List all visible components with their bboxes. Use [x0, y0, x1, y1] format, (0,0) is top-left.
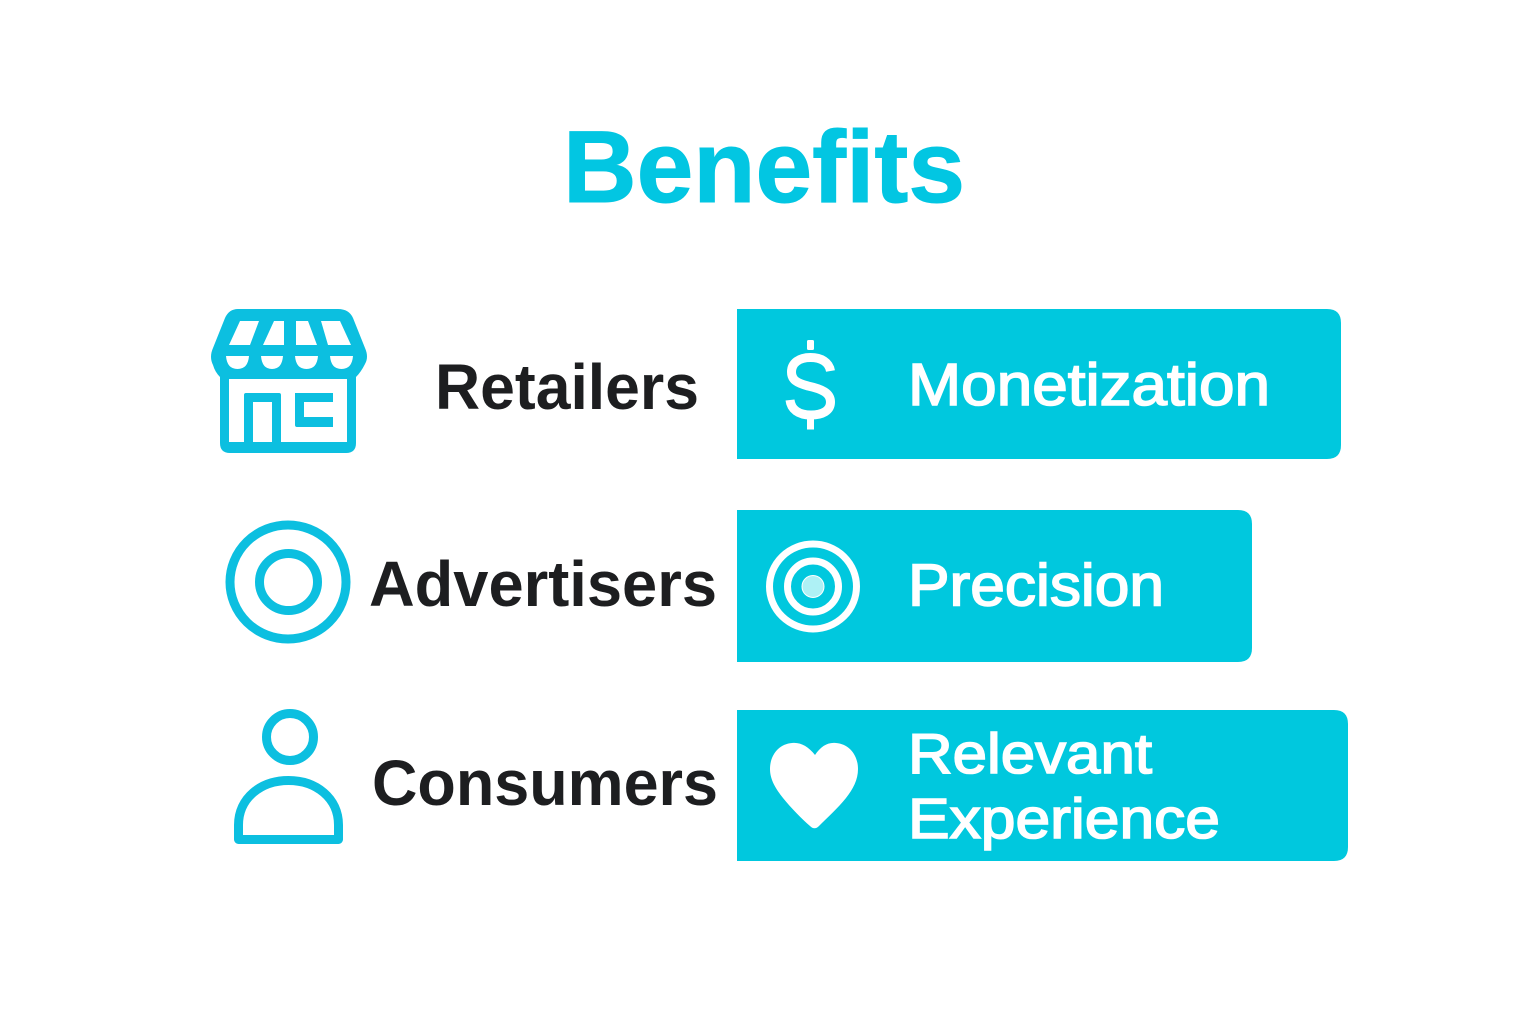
panel: relevant experience: [737, 710, 1348, 861]
panel: precision: [737, 510, 1252, 662]
icon: person: [238, 714, 338, 840]
title: Benefits: [563, 110, 965, 224]
text: precision: Precision: [908, 552, 1164, 618]
text: relevant experience: Relevant: [908, 722, 1152, 786]
label: consumers: Consumers: [372, 747, 718, 819]
label: advertisers: Advertisers: [369, 548, 717, 620]
text: relevant experience: [908, 722, 1220, 851]
panel: monetization: [737, 309, 1341, 459]
icon: dollar sign: [790, 340, 830, 430]
icon: target outline: [230, 525, 346, 639]
row: advertisers: [230, 510, 1252, 662]
icon: bullseye: [770, 544, 856, 629]
row: retailers: [211, 309, 1341, 459]
text: monetization: Monetization: [908, 352, 1270, 418]
text: relevant experience: Experience: [908, 787, 1220, 851]
row: consumers: [238, 710, 1348, 861]
label: retailers: Retailers: [435, 351, 699, 423]
icon: heart: [770, 743, 858, 828]
icon: storefront: [211, 309, 367, 453]
